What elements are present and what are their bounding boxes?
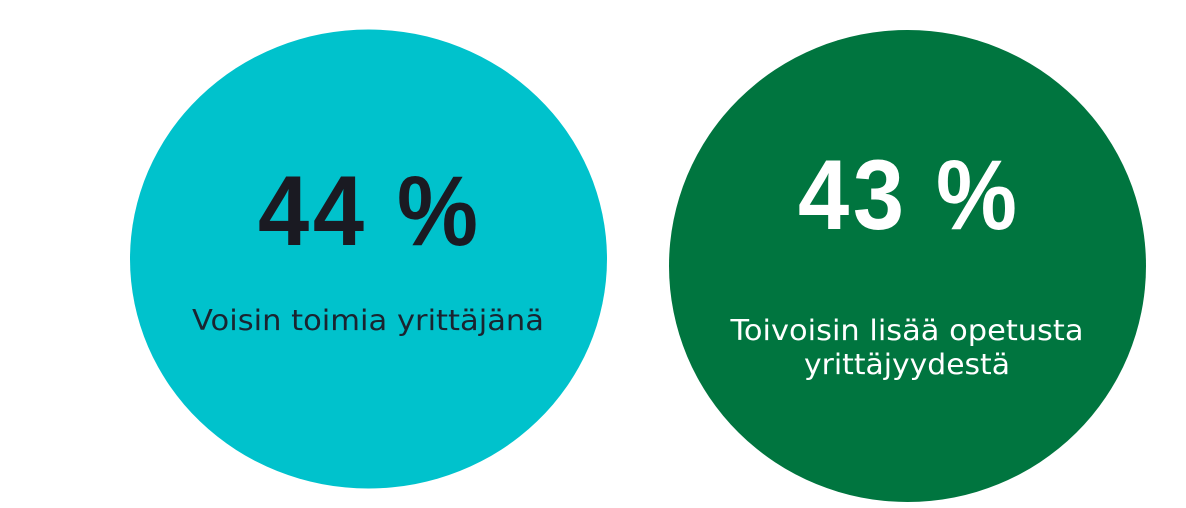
label: Voisin toimia yrittäjänä: Voisin toimia yrittäjänä [192, 304, 544, 337]
circle: green background [669, 30, 1146, 502]
label line 1: Toivoisin lisää opetusta [729, 314, 1084, 347]
panel: 43 % circle [669, 30, 1146, 502]
statistic: 43 %: 43 [798, 140, 904, 251]
statistic: 43 % [798, 139, 1017, 251]
label: Toivoisin lisää opetusta yrittäjyydestä [729, 314, 1084, 381]
statistic: 44 % [258, 155, 478, 267]
circle: teal background [130, 30, 607, 488]
statistic: 44 %: % [397, 155, 478, 266]
statistic: 43 %: % [936, 139, 1017, 250]
label line 2: yrittäjyydestä [804, 348, 1010, 381]
panel: 44 % circle [130, 30, 607, 488]
statistic: 44 %: 44 [258, 156, 364, 267]
